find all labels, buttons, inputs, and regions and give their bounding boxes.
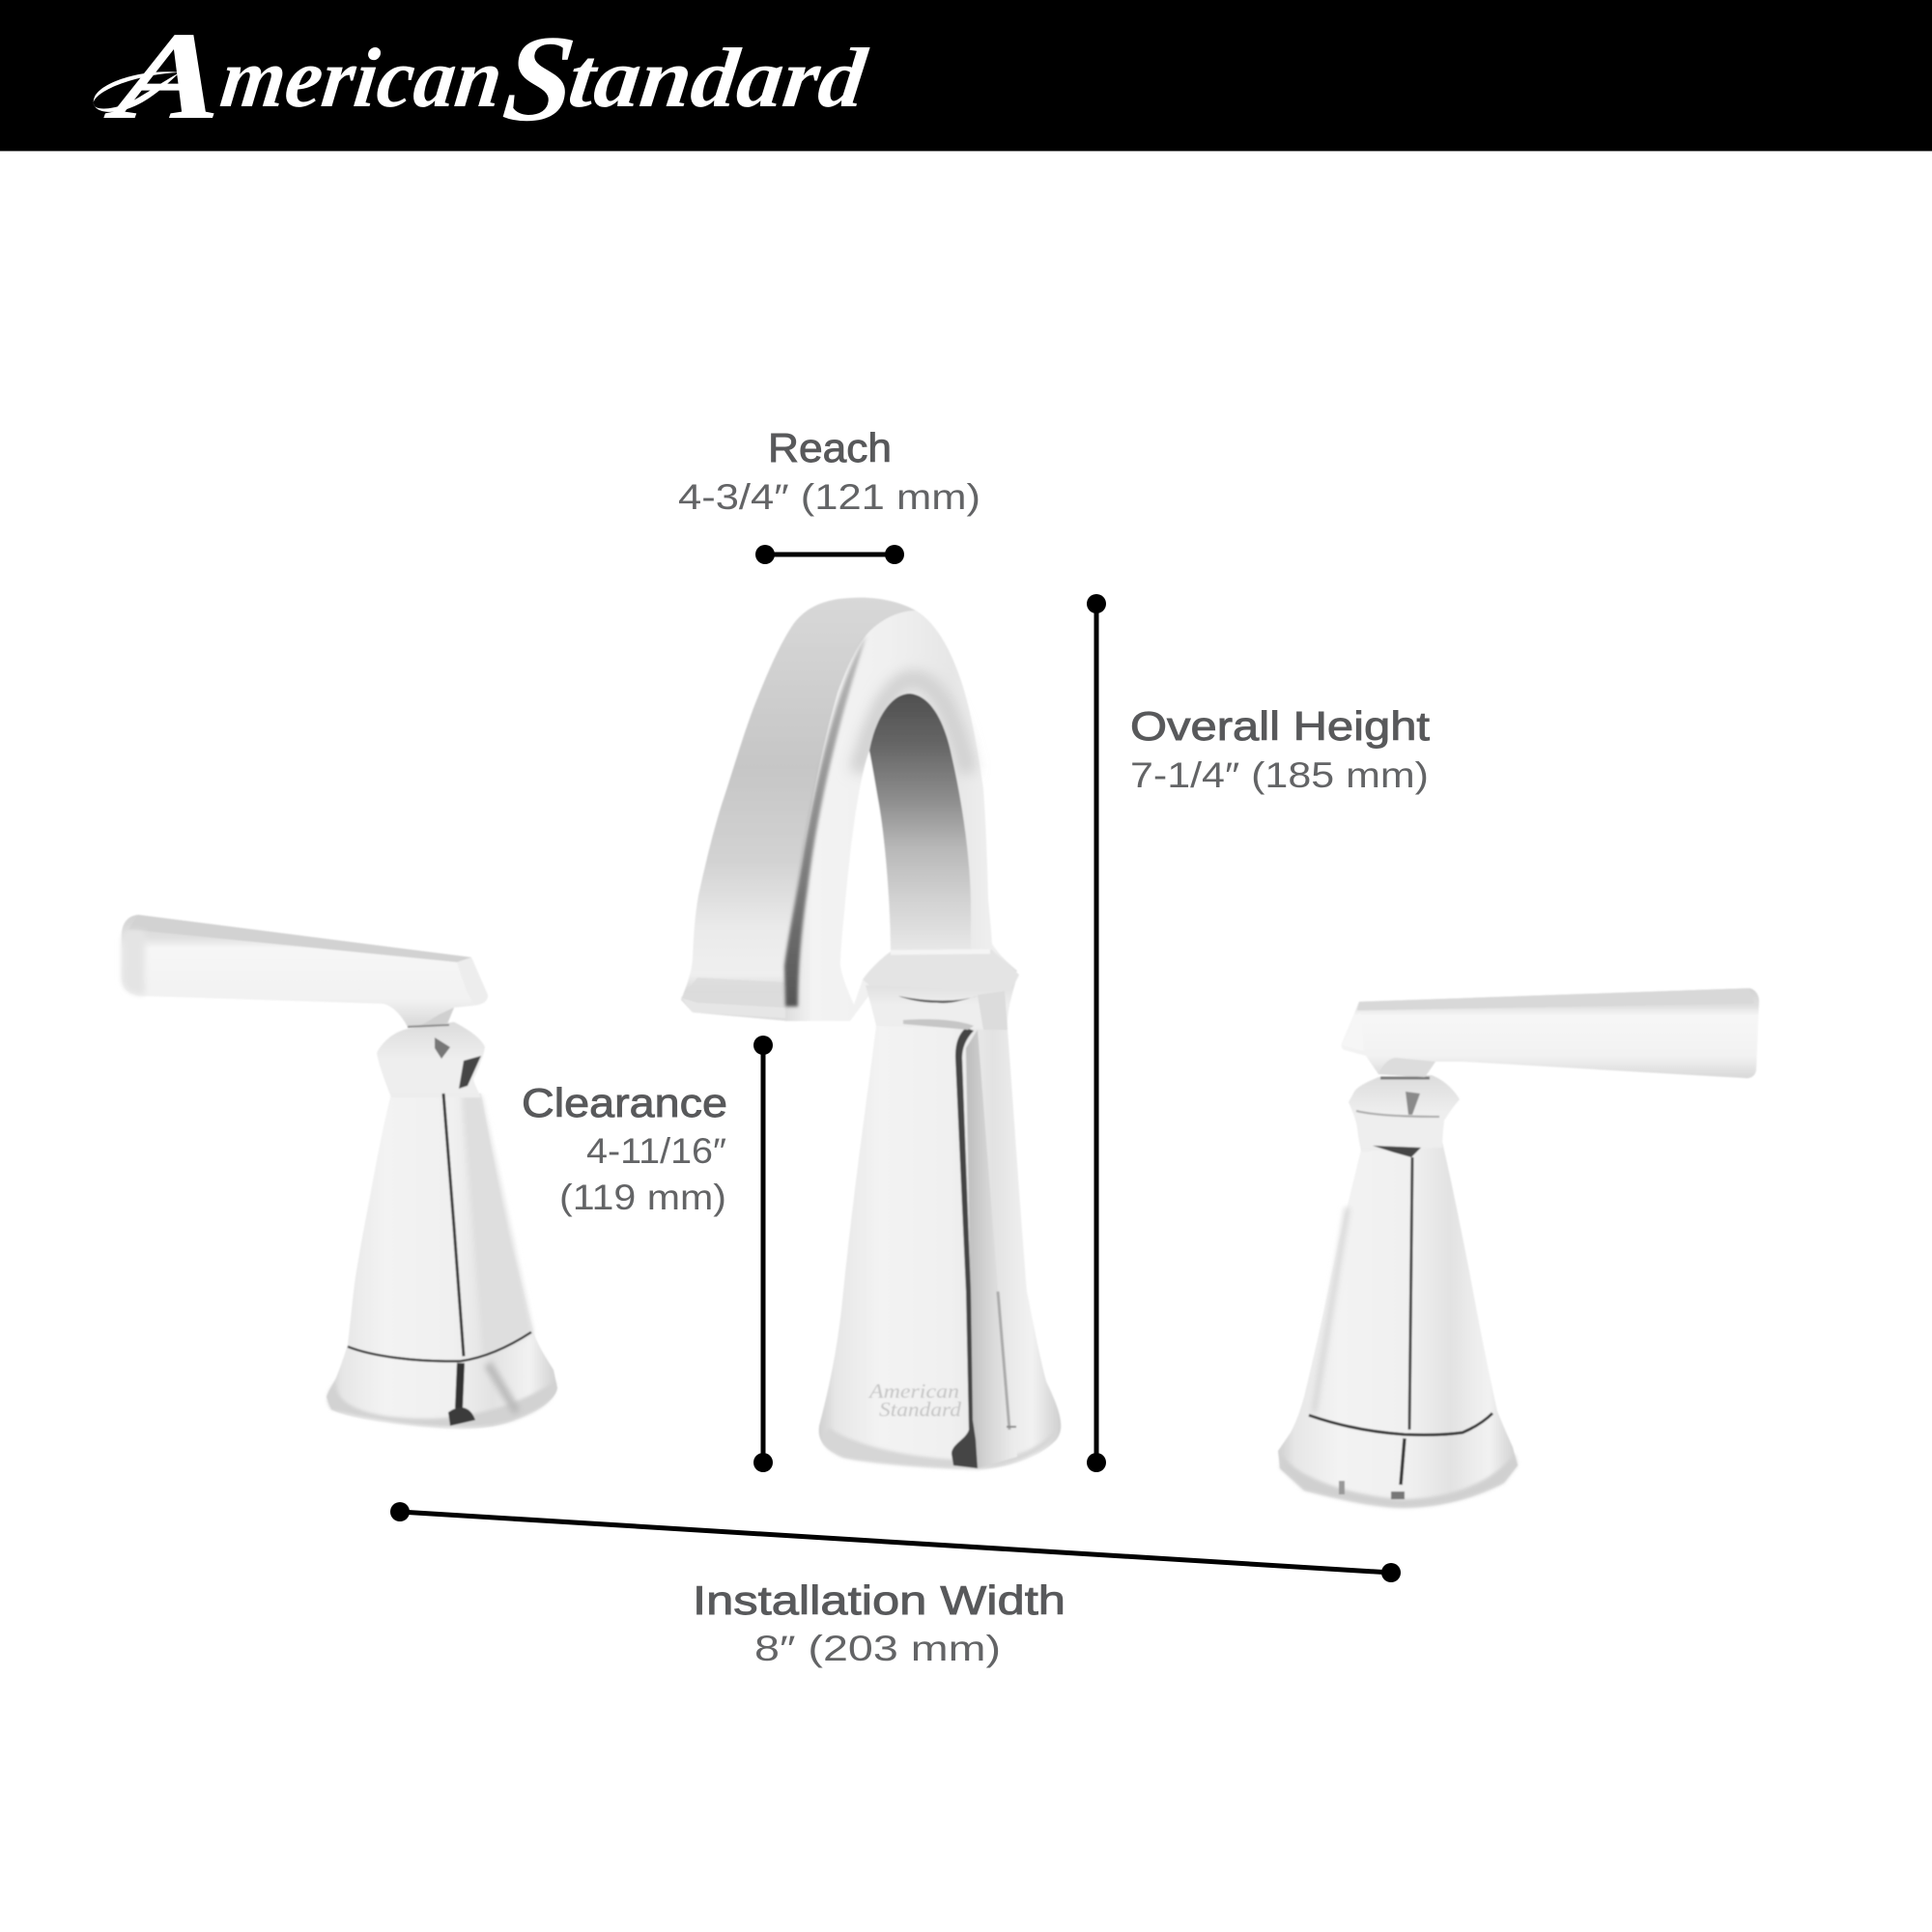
spout mouth lip — [681, 978, 852, 1021]
band line — [1309, 1413, 1492, 1435]
secondary band — [966, 1030, 1017, 1468]
reach value: 4-3/4″ (121 mm) — [678, 477, 980, 517]
spout inner arch — [869, 694, 971, 952]
collar — [377, 1022, 485, 1097]
base shade — [327, 1381, 555, 1427]
logo: American Standard: S — [497, 10, 582, 147]
logo: American Standard: tandard — [564, 31, 873, 126]
body — [819, 1026, 1061, 1469]
installation width label: Installation Width — [693, 1577, 1065, 1623]
collar — [1349, 1075, 1460, 1151]
clearance label: Clearance — [522, 1080, 727, 1125]
logo: American Standard — [94, 7, 873, 147]
engraved logo: American — [867, 1379, 959, 1403]
overall height value: 7-1/4″ (185 mm) — [1130, 755, 1429, 795]
installation width value: 8″ (203 mm) — [754, 1629, 1001, 1668]
clearance line — [753, 1036, 773, 1472]
engraved logo: Standard — [879, 1398, 962, 1421]
band line — [348, 1332, 531, 1361]
collar top — [863, 950, 1019, 990]
base shade — [823, 1428, 1057, 1469]
right handle — [1278, 988, 1759, 1508]
installation width line — [390, 1502, 1401, 1582]
lever — [1342, 988, 1759, 1078]
stem — [1378, 1058, 1435, 1077]
dark streak — [952, 1028, 978, 1468]
overall height label: Overall Height — [1130, 703, 1430, 749]
overall height line — [1087, 594, 1106, 1472]
clearance value inches: 4-11/16″ — [586, 1131, 726, 1171]
dimension: overall height — [1087, 594, 1430, 1472]
left handle — [122, 915, 557, 1429]
spout ridge shadow — [784, 636, 867, 1007]
reflection lines — [443, 1094, 464, 1356]
logo: American Standard: merican — [216, 31, 508, 126]
dimension: clearance — [522, 1036, 773, 1472]
logo: American Standard: A — [100, 7, 232, 146]
reach label: Reach — [768, 425, 892, 470]
gap behind spout — [840, 751, 891, 1005]
base shade — [1280, 1454, 1518, 1508]
clearance value mm: (119 mm) — [559, 1178, 726, 1217]
center faucet spout and body — [681, 598, 1061, 1469]
dimension: installation width — [390, 1502, 1401, 1668]
reflection lines — [1409, 1157, 1412, 1430]
cone body — [1278, 1142, 1518, 1508]
lever — [122, 915, 488, 1027]
dimension: reach — [678, 425, 980, 564]
spout front face — [784, 611, 1017, 1021]
reach line — [755, 545, 904, 564]
spout back face — [681, 598, 916, 1021]
dark wedge — [1373, 1146, 1421, 1157]
collar waist — [866, 980, 1016, 1030]
lever end cap — [457, 957, 488, 1005]
header bar — [0, 0, 1932, 152]
grey facet — [462, 1095, 533, 1357]
arch shade above opening — [858, 679, 968, 773]
cone body — [327, 1094, 557, 1429]
engraved logo — [867, 1379, 962, 1421]
